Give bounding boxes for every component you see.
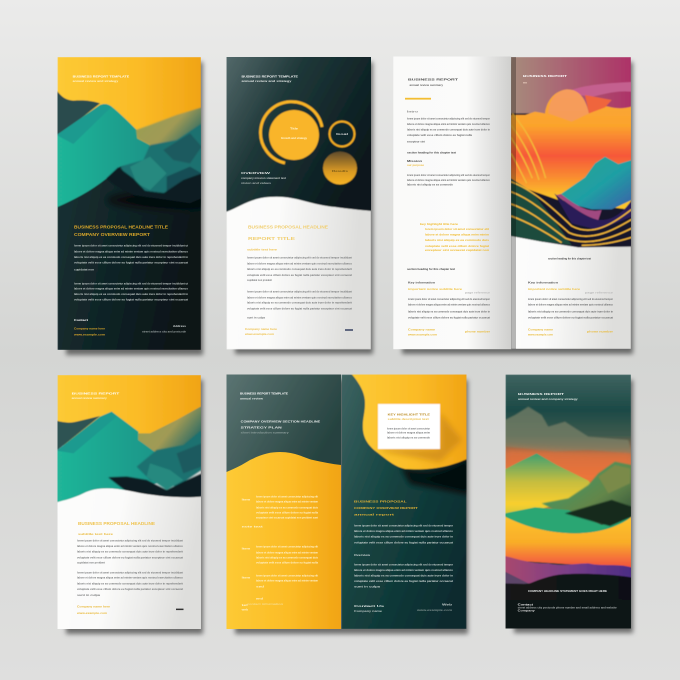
brochure 3: white left page: labore et dolore magna aliqua enim minim bbox=[425, 232, 489, 236]
brochure 4 text: labore et dolore magna aliqua enim ad minim veniam quis nostrud exercitation ullamco bbox=[77, 545, 183, 548]
gradient blob bbox=[323, 152, 357, 184]
brochure 1 text: BUSINESS PROPOSAL HEADLINE TITLE bbox=[74, 224, 168, 230]
brochure 2 text: sunt in culpa bbox=[247, 317, 266, 320]
brochure 2 text: lorem ipsum dolor sit amet consectetur adipiscing elit sed do eiusmod tempor incididunt bbox=[247, 291, 352, 294]
brochure 5: left yellow panel: lorem ipsum dolor sit amet consectetur adipiscing elit bbox=[256, 496, 318, 499]
brochure 5 right panel text: laboris nisi aliquip ex ea commodo bbox=[387, 436, 430, 439]
brochure 5 right panel text: laboris nisi aliquip ex ea commodo consequat duis aute irure dolor in bbox=[354, 535, 454, 538]
brochure 4 text: www.example.com bbox=[77, 612, 108, 615]
brochure 3 right page text: phone number bbox=[587, 331, 613, 334]
brochure 3: white left page: voluptate velit esse cillum dolore eu fugiat nulla pariatur occaecat bbox=[408, 316, 490, 319]
brochure 5: left yellow panel: short introduction summary bbox=[241, 432, 290, 434]
orange red cloud bbox=[511, 89, 632, 210]
brochure 6 text: COMPANY HEADLINE STATEMENT GOES RIGHT HERE bbox=[528, 590, 607, 593]
brochure 3: white left page: key highlight title here bbox=[420, 223, 459, 226]
brochure 5: left yellow panel: STRATEGY PLAN bbox=[241, 426, 282, 430]
brochure 2 text: Goal bbox=[336, 133, 349, 136]
brochure 5: left yellow panel: Item bbox=[242, 576, 251, 579]
brochure 3 right page text: laboris nisi aliquip ex ea commodo consequat duis aute irure dolor in bbox=[528, 311, 613, 314]
brochure 5: left yellow panel: labore et dolore magna aliqua enim ad minim veniam bbox=[256, 580, 319, 583]
brochure 3: white left page: Intro bbox=[407, 111, 419, 114]
brochure 5: left yellow panel bbox=[226, 374, 341, 629]
brochure 2 text: BUSINESS REPORT TEMPLATE bbox=[242, 74, 298, 78]
brochure 3 right page text: voluptate velit esse cillum dolore eu fugiat nulla pariatur occaecat bbox=[528, 316, 613, 319]
brochure 4 text: sunt in culpa bbox=[77, 594, 101, 597]
brochure 1 text: Company name here bbox=[74, 328, 106, 331]
brochure 3: white left page: laboris nisi aliquip ex ea commodo bbox=[407, 183, 454, 186]
circle diagram: ring bbox=[261, 102, 322, 163]
brochure 4 text: BUSINESS PROPOSAL HEADLINE bbox=[78, 521, 155, 526]
brochure 5: left yellow panel: voluptate velit esse cillum dolore eu fugiat nulla bbox=[256, 512, 319, 515]
brochure 3 right page text: lorem ipsum dolor sit amet consectetur adipiscing elit sed do eiusmod tempor bbox=[528, 298, 613, 301]
brochure 3 right page text: www.example.com bbox=[528, 333, 554, 336]
brochure 3 right page text bbox=[523, 74, 614, 336]
brochure 5 right panel text: Contact Us bbox=[354, 604, 385, 608]
brochure 4 text: annual review summary bbox=[72, 397, 107, 400]
brochure 1 text: Contact bbox=[74, 319, 88, 322]
brochure 3: white left page: Company name bbox=[408, 328, 436, 331]
brochure 2 text: BUSINESS PROPOSAL HEADLINE bbox=[248, 224, 328, 230]
brochure 6: sunset mountain poster bbox=[505, 374, 632, 630]
gold stripes bbox=[511, 113, 632, 245]
brochure 4 text: laboris nisi aliquip ex ea commodo consequat duis aute irure dolor in reprehenderit bbox=[77, 582, 183, 585]
brochure 5 right panel text: BUSINESS PROPOSAL bbox=[354, 499, 407, 503]
brochure 1 text: annual review and strategy bbox=[73, 80, 119, 83]
white wave bbox=[57, 488, 202, 633]
brochure 3: white left page: page reference bbox=[465, 292, 491, 295]
shadow below mountain bbox=[107, 191, 220, 209]
brochure 3: white left page: phone number bbox=[465, 331, 490, 334]
brochure 5: left yellow panel: Item bbox=[242, 548, 251, 551]
brochure 3: right page with colorful artwork bbox=[511, 57, 632, 349]
brochure 1 text: labore et dolore magna aliqua enim ad minim veniam quis nostrud exercitation ullamco bbox=[74, 250, 189, 253]
brochure 3: white left page: lorem ipsum dolor sit amet consectetur adipiscing elit sed do eiusmod tempor bbox=[407, 174, 490, 177]
brochure 3: white left page: annual review summary bbox=[410, 84, 444, 87]
purple hills bbox=[505, 556, 632, 583]
brochure 3: white left page: important notice subtitle here bbox=[408, 287, 462, 291]
brochure 1: yellow and teal mountain cover bbox=[58, 57, 201, 350]
shadow under blob bbox=[400, 455, 470, 495]
white card bbox=[378, 404, 440, 449]
brochure 5: left yellow panel: end bbox=[256, 598, 264, 601]
brochure 5 right panel text: lorem ipsum dolor sit amet consectetur bbox=[387, 427, 430, 430]
dark hills bbox=[505, 574, 632, 630]
brochure 5 right panel text: labore et dolore magna aliqua enim ad minim veniam quis nostrud ullamco bbox=[354, 569, 454, 572]
spine shadow bbox=[511, 57, 516, 349]
yellow blob bbox=[352, 374, 467, 469]
brochure 5: left yellow panel: laboris nisi aliquip ex ea commodo consequat duis bbox=[256, 506, 319, 509]
brochure 6 text: Company bbox=[518, 610, 536, 613]
green bowl bbox=[505, 507, 632, 533]
misty clouds bbox=[505, 407, 632, 453]
brochure 3: white left page: excepteur sint bbox=[407, 141, 425, 144]
yellow band bbox=[505, 517, 632, 568]
brochure 2 text: voluptate velit esse cillum dolore eu fugiat nulla pariatur excepteur sint occaecat bbox=[247, 274, 352, 277]
brochure 1 text: lorem ipsum dolor sit amet consectetur adipiscing elit sed do eiusmod tempor incididunt ut bbox=[74, 282, 188, 285]
brochure 3 right page text: labore et dolore magna aliqua enim ad minim veniam quis nostrud ullamco bbox=[528, 303, 613, 306]
brochure 5 right panel text: lorem ipsum dolor sit amet consectetur adipiscing elit sed do eiusmod tempor bbox=[354, 563, 453, 566]
brochure 4 text: labore et dolore magna aliqua enim ad minim veniam quis nostrud exercitation ullamco bbox=[77, 577, 183, 580]
brochure 1 text: Address bbox=[173, 325, 187, 328]
brochure 4: yellow and teal cover with white lower area bbox=[57, 375, 202, 633]
brochure 3: white left page: labore et dolore magna aliqua enim ad minim veniam quis nostrud ullamco bbox=[408, 303, 490, 306]
olive forest bbox=[138, 406, 202, 453]
brochure 2 text: subtitle text here bbox=[247, 248, 278, 252]
dark left ridge bbox=[57, 91, 100, 137]
brochure 3 right page text: Key information bbox=[528, 281, 559, 284]
teal mountain bbox=[57, 104, 150, 207]
brochure 3: white left page: section heading for this chapter text bbox=[407, 151, 456, 154]
brochure 5 right panel text: labore et dolore magna aliqua enim ad minim veniam quis nostrud ullamco bbox=[354, 530, 454, 533]
brochure 5 right panel text: labore et dolore magna aliqua enim bbox=[387, 432, 431, 435]
brochure 1 text: labore et dolore magna aliqua enim ad minim veniam quis nostrud exercitation ullamco bbox=[74, 288, 189, 291]
brochure 3: white left page: our purpose bbox=[407, 164, 425, 167]
brochure 5 right panel text: annual report bbox=[354, 512, 394, 516]
brochure 3: white left page: www.example.com bbox=[408, 333, 438, 336]
brochure 2 text: www.example.com bbox=[245, 333, 275, 336]
brochure 5: left yellow panel: contact information bbox=[247, 603, 284, 606]
brochure 3: white left page bbox=[393, 56, 511, 349]
brochure 5 right panel text: Web bbox=[442, 603, 453, 606]
brochure 5 right panel text: KEY HIGHLIGHT TITLE bbox=[388, 413, 431, 416]
brochure 3 right page text: page reference bbox=[585, 292, 614, 295]
brochure 3: white left page: laboris nisi aliquip ex ea commodo consequat duis aute irure dolor in bbox=[407, 128, 490, 131]
brochure 3: white left page: Mission bbox=[407, 160, 423, 163]
brochure 2 text: Company name here bbox=[245, 328, 278, 331]
brochure 3: white left page: labore et dolore magna aliqua enim ad minim veniam quis nostrud ullamco bbox=[407, 179, 490, 182]
brochure 1 text bbox=[73, 74, 189, 336]
brochure 6 text bbox=[518, 392, 617, 613]
brochure 1 text: voluptate velit esse cillum dolore eu fugiat nulla pariatur excepteur sint occaecat bbox=[74, 261, 188, 264]
brochure 1 text: COMPANY OVERVIEW REPORT bbox=[74, 232, 151, 237]
brochure 5 right panel text: Overview bbox=[354, 554, 370, 557]
brochure 2 text: laboris nisi aliquip ex ea commodo consequat duis aute irure dolor in reprehenderit bbox=[247, 268, 352, 271]
brochure 6 text: BUSINESS REPORT bbox=[518, 392, 564, 396]
brochure 2 text: labore et dolore magna aliqua enim ad minim veniam quis nostrud exercitation ullamco bbox=[247, 262, 352, 265]
brochure 6 text: street address city postcode phone number and email address and website bbox=[518, 606, 617, 609]
brochure 3 right page text: no bbox=[523, 82, 528, 85]
brochure 4 text bbox=[72, 392, 184, 615]
brochure 5 right panel text: laboris nisi aliquip ex ea commodo consequat duis aute irure dolor in bbox=[354, 575, 454, 578]
brochure 5 right panel text: COMPANY OVERVIEW REPORT bbox=[354, 506, 418, 510]
brochure 4 text: voluptate velit esse cillum dolore eu fugiat nulla pariatur excepteur sint occaecat bbox=[77, 588, 183, 591]
green mountain bbox=[505, 453, 593, 517]
brochure 5 right panel text: subtitle description text bbox=[388, 418, 429, 421]
brochure 3: white left page: BUSINESS REPORT bbox=[408, 78, 458, 82]
brochure 3 right page text: Company name bbox=[528, 328, 554, 331]
brochure 5 right panel text: voluptate velit esse cillum dolore eu fugiat nulla pariatur occaecat bbox=[354, 580, 453, 583]
brochure 2 text: annual review and strategy bbox=[242, 80, 292, 83]
brochure 2 text: cupidatat non proident bbox=[247, 279, 272, 282]
brochure 5 right panel text: Company name bbox=[354, 610, 383, 613]
brochure 5: left yellow panel: annual review bbox=[240, 397, 263, 400]
card shadow bbox=[378, 412, 462, 462]
brochure 5: left yellow panel: labore et dolore magna aliqua enim ad minim veniam bbox=[256, 501, 319, 504]
brochure 3: white left page: lorem ipsum dolor sit amet consectetur adipiscing elit sed do eiusmod tempor bbox=[408, 298, 490, 301]
brochure 1 text: laboris nisi aliquip ex ea commodo consequat duis aute irure dolor in reprehenderit in bbox=[74, 256, 189, 259]
brochure 2 text: vision and values bbox=[241, 182, 272, 185]
small ring bbox=[330, 122, 354, 146]
brochure 5: right dark panel with yellow blob bbox=[342, 374, 470, 629]
mauve stripe bbox=[565, 82, 632, 97]
brochure 1 text: street address city and postcode bbox=[142, 331, 187, 334]
teal mountain bbox=[561, 157, 632, 209]
brochure 5: left yellow panel: note text bbox=[242, 526, 263, 529]
brochure 1 text: www.example.com bbox=[74, 333, 106, 336]
purple bowl bbox=[554, 193, 632, 230]
brochure 5 right panel text: lorem ipsum dolor sit amet consectetur adipiscing elit sed do eiusmod tempor bbox=[354, 525, 453, 528]
brochure 5 right panel text: voluptate velit esse cillum dolore eu fugiat nulla pariatur occaecat bbox=[354, 541, 453, 544]
brochure 3: white left page: laboris nisi aliquip ex ea commodo duis bbox=[425, 238, 489, 242]
brochure 5: left yellow panel: web bbox=[242, 608, 249, 611]
brochure 3: white left page: section heading for this chapter text bbox=[407, 268, 455, 271]
brochure shadows bbox=[66, 62, 633, 634]
brochure 3 right page text: important notice subtitle here bbox=[528, 287, 580, 291]
brochure 2 text: lorem ipsum dolor sit amet consectetur adipiscing elit sed do eiusmod tempor incididunt bbox=[247, 256, 352, 259]
brochure 5: left yellow panel: laboris nisi aliquip ex ea commodo consequat duis bbox=[256, 557, 319, 560]
olive and forest blocks bbox=[107, 107, 202, 203]
forest bbox=[541, 460, 631, 516]
brochure 6 text: annual review and company strategy bbox=[518, 398, 579, 401]
brochure 5: left yellow panel: Item bbox=[242, 498, 251, 501]
teal mountain bbox=[57, 412, 160, 507]
brochure 5 right panel text: www.example.com bbox=[417, 609, 453, 612]
brochure 1 text: BUSINESS REPORT TEMPLATE bbox=[73, 74, 129, 78]
brochure 5: left yellow panel: excepteur sint occaecat cupidatat non proident sunt bbox=[256, 517, 318, 520]
brochure 3: white left page: labore et dolore magna aliqua enim ad minim veniam quis nostrud ullamco bbox=[407, 123, 490, 126]
brochure 4 text: lorem ipsum dolor sit amet consectetur adipiscing elit sed do eiusmod tempor incididunt bbox=[77, 571, 183, 574]
brochure 5: left yellow panel: tel bbox=[242, 604, 248, 607]
large circle bbox=[269, 110, 319, 160]
brochure 1 text: voluptate velit esse cillum dolore eu fugiat nulla pariatur excepteur sint occaecat bbox=[74, 298, 188, 301]
brochure 5: left yellow panel: lorem ipsum dolor sit amet consectetur adipiscing elit bbox=[256, 575, 318, 578]
brochure 1 text: cupidatat non bbox=[74, 268, 95, 271]
brochure 4 text: cupidatat non proident bbox=[77, 562, 105, 565]
brochure 3: white left page: lorem ipsum dolor sit amet consectetur elit bbox=[425, 227, 489, 231]
brochure 4 text: laboris nisi aliquip ex ea commodo consequat duis aute irure dolor in reprehenderit bbox=[77, 551, 183, 554]
orange sky bbox=[506, 445, 631, 469]
brochure 5: left yellow panel: lorem ipsum dolor sit amet consectetur adipiscing elit bbox=[256, 546, 318, 549]
brochure 5: left yellow panel: sed bbox=[256, 586, 265, 589]
brochure 2 text: laboris nisi aliquip ex ea commodo consequat duis aute irure dolor in reprehenderit bbox=[247, 302, 352, 305]
brochure 3 right page text: BUSINESS REPORT bbox=[523, 74, 567, 78]
brochure 3: white left page: Key information bbox=[408, 281, 436, 284]
brochure 3: white left page: excepteur sint occaecat cupidatat non bbox=[425, 248, 489, 252]
brochure 5: left yellow panel: voluptate velit esse cillum dolore eu fugiat nulla bbox=[256, 562, 319, 565]
brochure 2 text: labore et dolore magna aliqua enim ad minim veniam quis nostrud exercitation ullamco bbox=[247, 296, 352, 299]
brochure 4 text: voluptate velit esse cillum dolore eu fugiat nulla pariatur excepteur sint occaecat bbox=[77, 556, 183, 559]
dark art backing bbox=[511, 113, 632, 247]
brochure 1 text: laboris nisi aliquip ex ea commodo consequat duis aute irure dolor in reprehenderit in bbox=[74, 293, 189, 296]
brochure 1 text: lorem ipsum dolor sit amet consectetur adipiscing elit sed do eiusmod tempor incididunt ut bbox=[74, 245, 188, 248]
brochure 3: white left page: voluptate velit esse cillum dolore fugiat bbox=[425, 244, 489, 248]
brochure 2: dark page with circle diagram bbox=[226, 56, 372, 350]
brochure 5 right panel text bbox=[354, 413, 454, 613]
brochure 2 text: company mission statement text bbox=[241, 177, 286, 180]
brochure 2 text: OVERVIEW bbox=[241, 171, 270, 175]
brochure 4 text: subtitle text here bbox=[78, 533, 114, 536]
brochure 3: white left page: lorem ipsum dolor sit amet consectetur adipiscing elit sed do eiusmod tempor bbox=[407, 117, 490, 120]
brochure 5 right panel text: sunt in culpa bbox=[354, 586, 381, 589]
brochure 5: left yellow panel: BUSINESS REPORT TEMPLATE bbox=[240, 393, 288, 396]
lower left green bbox=[511, 178, 572, 245]
brochure 4 text: Company name here bbox=[77, 605, 111, 608]
brochure 2 text: REPORT TITLE bbox=[248, 236, 295, 241]
brochure 3: white left page: voluptate velit esse cillum dolore eu fugiat nulla bbox=[407, 134, 473, 137]
brochure 2 text: Title bbox=[290, 128, 299, 130]
brochure 2 text: Growth and strategy bbox=[281, 137, 308, 140]
dark ridge bbox=[57, 416, 100, 451]
brochure 2 text: Results bbox=[332, 170, 349, 173]
brochure 3: white left page: laboris nisi aliquip ex ea commodo consequat duis aute irure dolor in bbox=[408, 311, 490, 314]
brochure 2 text bbox=[241, 74, 353, 336]
brochure 2 text: voluptate velit esse cillum dolore eu fugiat nulla pariatur excepteur sint occaecat bbox=[247, 307, 352, 310]
brochure 6 text: Contact bbox=[518, 603, 533, 606]
brochure 4 text: BUSINESS REPORT bbox=[72, 392, 120, 396]
dark trees bbox=[565, 500, 632, 526]
brochure 3 right page text: section heading for this chapter text bbox=[548, 257, 591, 260]
brochure 5: left yellow panel: COMPANY OVERVIEW SECTION HEADLINE bbox=[241, 420, 320, 424]
brochure 5: left yellow panel: labore et dolore magna aliqua enim ad minim veniam bbox=[256, 551, 319, 554]
brochure 4 text: lorem ipsum dolor sit amet consectetur adipiscing elit sed do eiusmod tempor incididunt bbox=[77, 540, 183, 543]
